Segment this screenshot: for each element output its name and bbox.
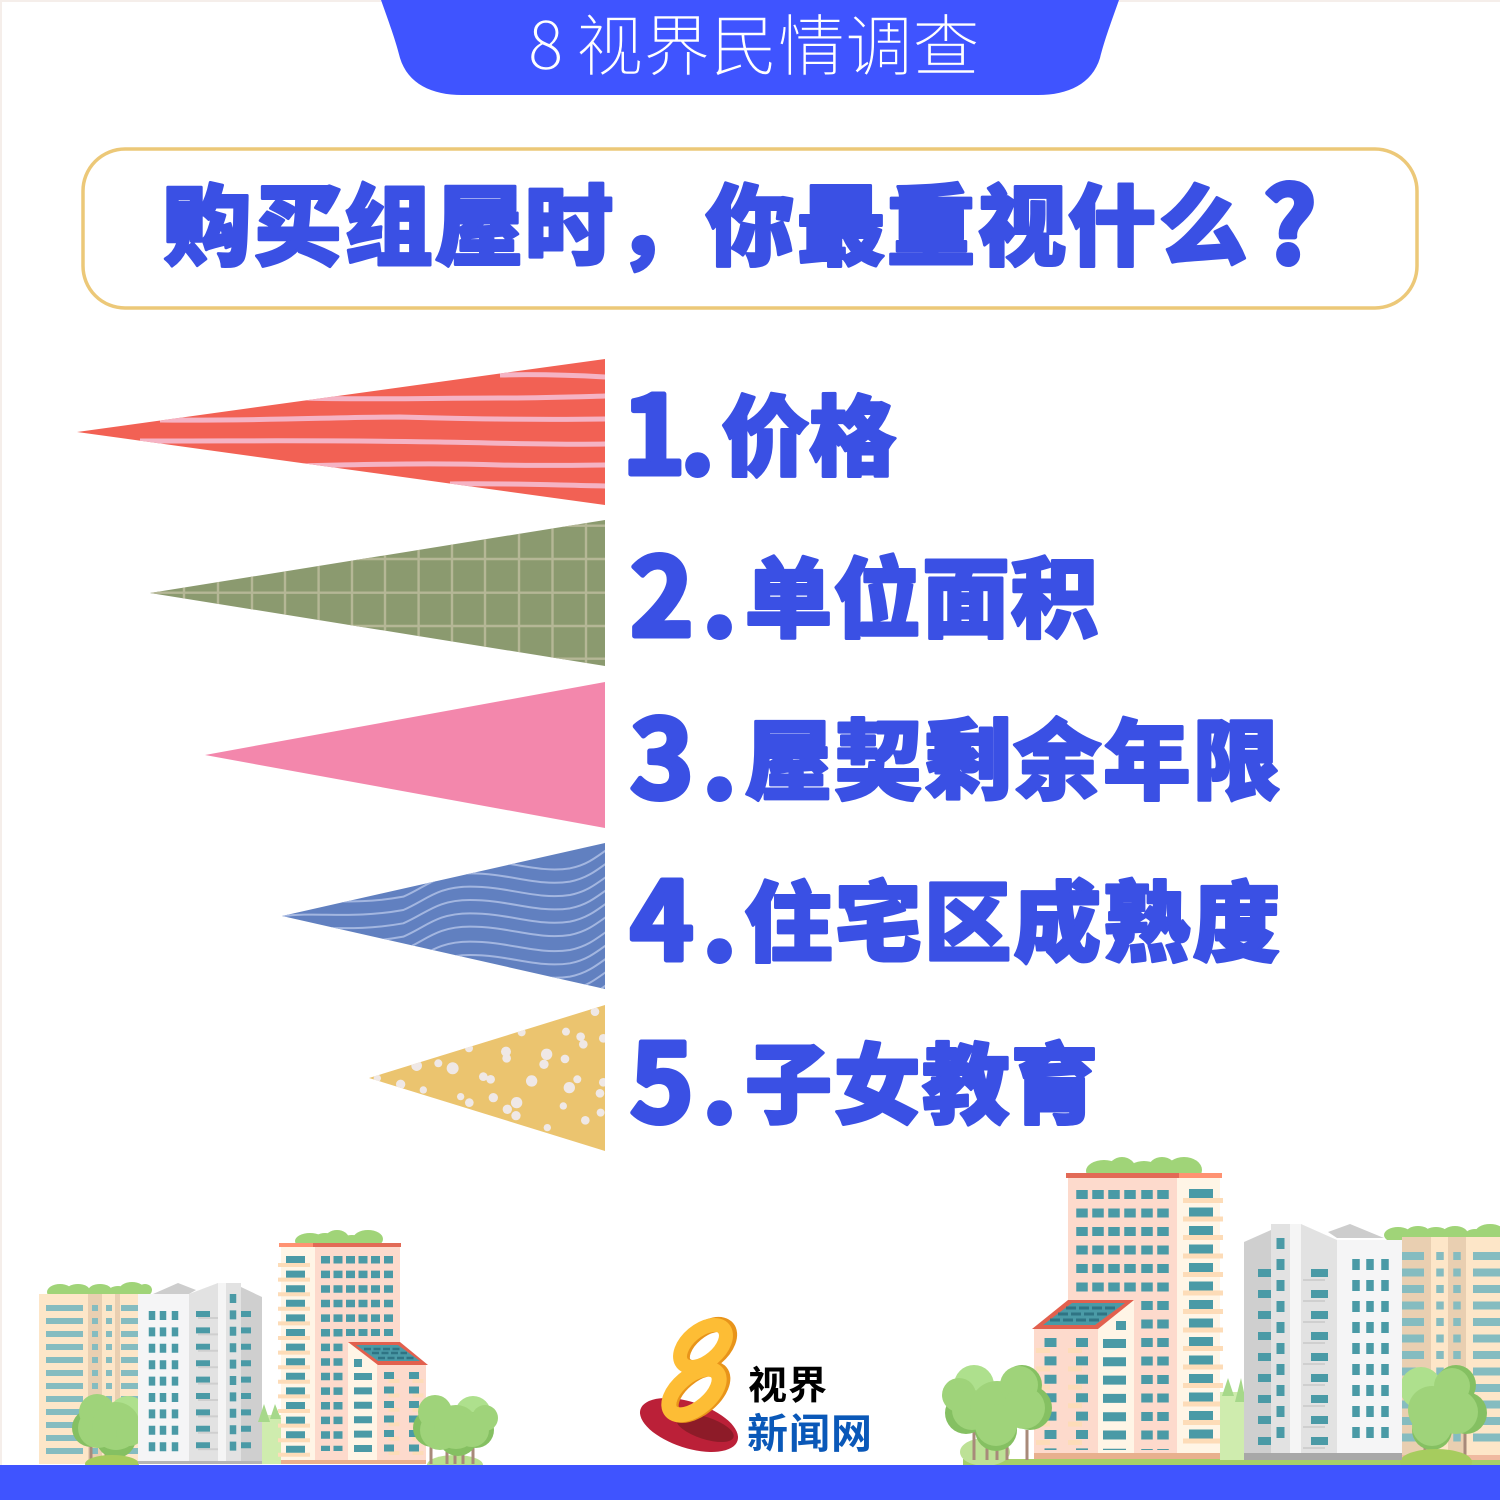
- logo: wordmark: 视界: [748, 1365, 827, 1408]
- right pink tower: [1032, 1157, 1222, 1459]
- small hill with pines, left: [258, 1404, 282, 1464]
- logo: wordmark: [747, 1365, 872, 1457]
- right cream building: [1384, 1224, 1500, 1460]
- ranked bar 3: pink triangle: [205, 682, 605, 828]
- ranked item 1: price: 1.: [622, 350, 715, 506]
- ranked item 1: price: 价格: [722, 390, 896, 487]
- ranked item 5: children's education: [630, 998, 1098, 1154]
- question heading: [163, 142, 1316, 293]
- ranked bar 4: blue wave triangle: [282, 843, 605, 989]
- ranked bar 1: red striped triangle: [77, 359, 606, 505]
- ranked item 2: unit area: [630, 512, 1098, 668]
- question heading: ?: [1263, 142, 1316, 293]
- ranked item 5: children's education: 子女教育: [745, 1038, 1098, 1135]
- left tree cluster A: [72, 1394, 148, 1473]
- ranked bar 5: yellow speckled triangle: [369, 1005, 608, 1151]
- ranked item 4: estate maturity: [630, 836, 1280, 992]
- ranked item 2: unit area: 单位面积: [745, 552, 1098, 649]
- question panel: [83, 142, 1417, 308]
- small hill with pines, right: [1220, 1378, 1246, 1460]
- header banner: [381, 0, 1119, 95]
- ranked item 3: remaining lease: 屋契剩余年限: [745, 714, 1280, 811]
- left pink tower: [279, 1230, 428, 1464]
- bottom bar: [0, 1465, 1500, 1500]
- ranked item 3: remaining lease: 3.: [630, 674, 737, 830]
- ground strip, right: [963, 1459, 1500, 1465]
- question heading: 购买组屋时，你最重视什么: [163, 178, 1247, 277]
- ranked item 4: estate maturity: 住宅区成熟度: [745, 876, 1280, 973]
- ranked item 4: estate maturity: 4.: [630, 836, 737, 992]
- left tree cluster B: [413, 1395, 498, 1475]
- left cream building: [39, 1282, 152, 1464]
- ranked item 1: price: [622, 350, 896, 506]
- logo: 8 emblem: [633, 1316, 745, 1463]
- ranked item 2: unit area: 2.: [630, 512, 737, 668]
- right tree cluster B: [1400, 1365, 1487, 1475]
- right white building: [1244, 1224, 1402, 1460]
- logo: wordmark: 新闻网: [747, 1411, 872, 1457]
- right tree cluster A: [942, 1365, 1052, 1466]
- left white building: [138, 1283, 262, 1464]
- ranked item 5: children's education: 5.: [630, 998, 737, 1154]
- ranked bar 2: green grid triangle: [150, 520, 605, 666]
- ranked item 3: remaining lease: [630, 674, 1280, 830]
